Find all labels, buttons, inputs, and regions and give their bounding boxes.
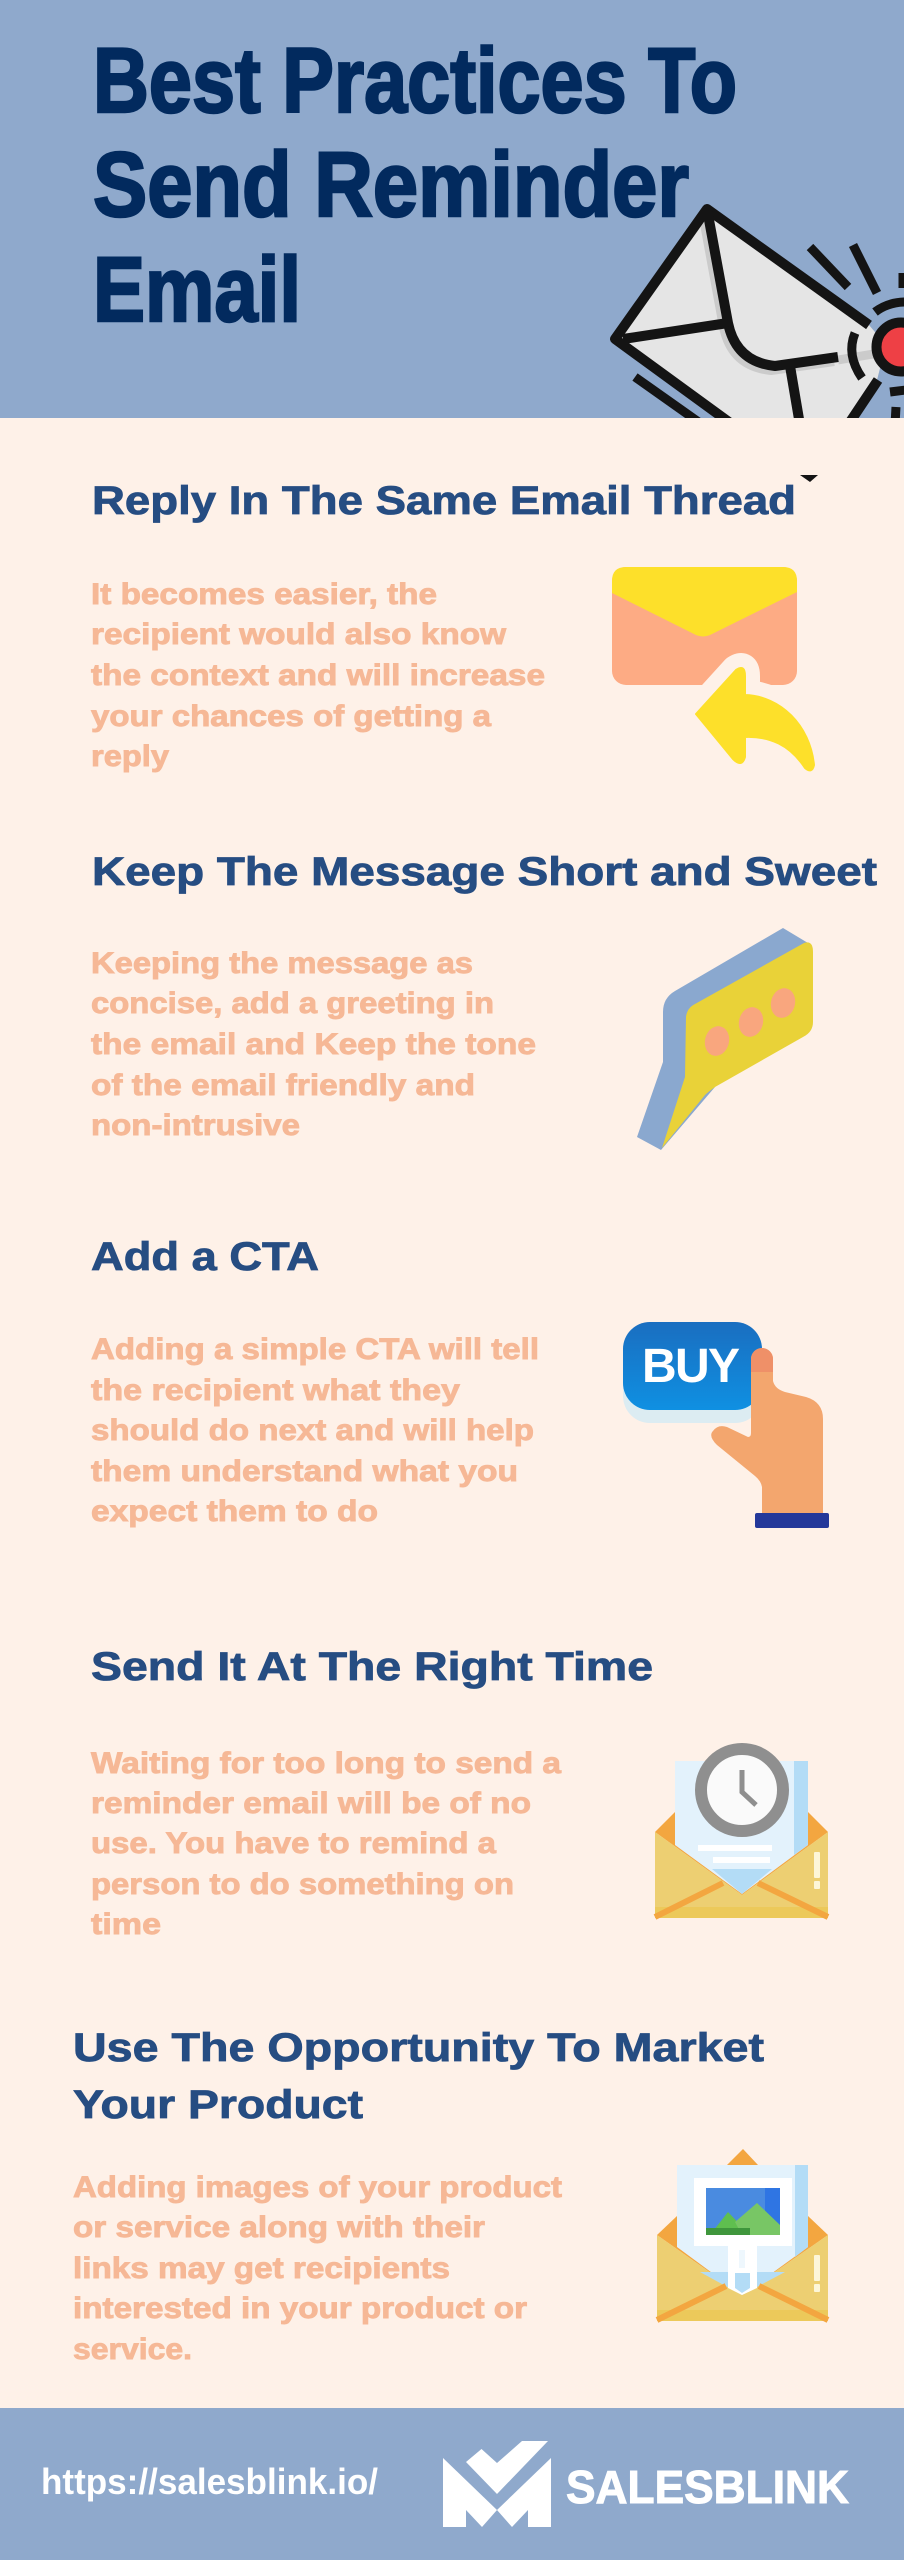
section 2 text: concise, add a greeting in (91, 987, 494, 1020)
section 3 heading: Add a CTA (91, 1235, 319, 1279)
section 5 text (73, 2171, 562, 2366)
section 3 text: expect them to do (91, 1495, 378, 1528)
section 4 text: reminder email will be of no (91, 1787, 531, 1820)
icon: envelope with clock (655, 1749, 828, 1918)
section 1 heading: Reply In The Same Email Thread (92, 479, 796, 523)
section 4 text: Waiting for too long to send a (91, 1747, 561, 1780)
section 5 heading: Use The Opportunity To Market (73, 2026, 764, 2070)
title: Send Reminder (93, 134, 689, 236)
section 2 text: the email and Keep the tone (91, 1028, 536, 1061)
icon: envelope with reply arrow (560, 567, 860, 790)
section 4 heading: Send It At The Right Time (91, 1645, 653, 1689)
header band (0, 0, 904, 418)
section 5 heading (73, 2026, 764, 2127)
section 3 text: the recipient what they (91, 1374, 460, 1407)
section 1 text: It becomes easier, the (91, 578, 437, 611)
section 2 text: Keeping the message as (91, 947, 473, 980)
icon: hand pressing buy button (623, 1322, 829, 1528)
section 4 text: use. You have to remind a (91, 1827, 496, 1860)
icon: envelope with red notification (615, 209, 904, 482)
icon: hand pressing buy button: BUY (642, 1340, 740, 1393)
section 5 text: or service along with their (73, 2211, 485, 2244)
title: Email (93, 239, 301, 341)
section 1 text: recipient would also know (91, 618, 507, 651)
title (93, 30, 737, 341)
section 3 text: Adding a simple CTA will tell (91, 1333, 539, 1366)
section 3 text: them understand what you (91, 1455, 518, 1488)
section 1 text: reply (91, 740, 169, 773)
section 2 text: of the email friendly and (91, 1069, 475, 1102)
section 3 text: should do next and will help (91, 1414, 534, 1447)
section 5 text: interested in your product or (73, 2292, 527, 2325)
section 3 text (91, 1333, 539, 1528)
footer band (0, 2408, 904, 2560)
section 1 text: your chances of getting a (91, 700, 491, 733)
section 5 text: links may get recipients (73, 2252, 450, 2285)
logo mark (443, 2441, 551, 2527)
section 4 text: person to do something on (91, 1868, 514, 1901)
title: Best Practices To (93, 30, 737, 132)
section 2 heading: Keep The Message Short and Sweet (92, 850, 877, 894)
footer url: https://salesblink.io/ (41, 2461, 378, 2502)
section 4 text: time (91, 1908, 161, 1941)
section 5 text: service. (73, 2333, 192, 2366)
section 5 text: Adding images of your product (73, 2171, 562, 2204)
icon: speech bubble (637, 928, 813, 1150)
icon: envelope with image (657, 2149, 828, 2321)
section 1 text (91, 578, 545, 773)
logo wordmark: SALESBLINK (566, 2461, 849, 2513)
section 5 heading: Your Product (73, 2083, 363, 2127)
section 2 text (91, 947, 536, 1142)
section 4 text (91, 1747, 561, 1941)
section 2 text: non-intrusive (91, 1109, 300, 1142)
section 1 text: the context and will increase (91, 659, 545, 692)
